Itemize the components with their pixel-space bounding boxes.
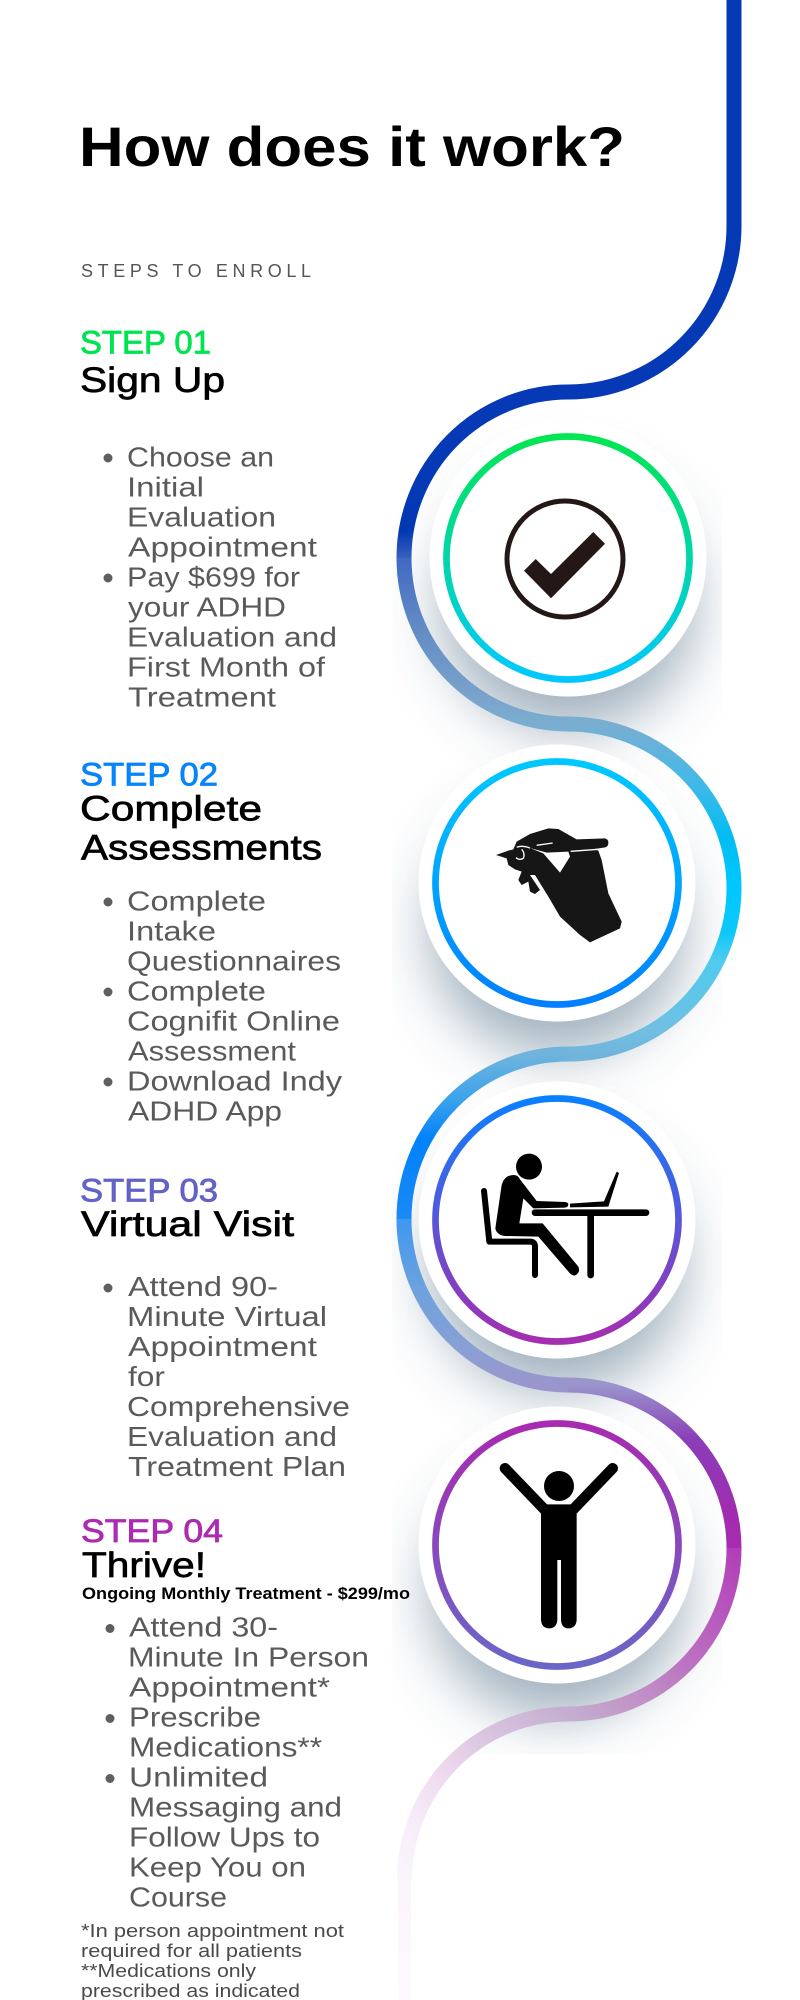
- step 02 list: Download Indy: [127, 1066, 342, 1096]
- circle shadows: [429, 475, 696, 1718]
- step 01 list: Choose an: [127, 442, 274, 472]
- step 01 label: STEP 01: [80, 324, 211, 360]
- step 03 list: Minute Virtual: [127, 1301, 327, 1332]
- step 04 list: Keep You on: [129, 1852, 306, 1882]
- step 02 list: Intake: [127, 916, 216, 946]
- step 02 list: ADHD App: [128, 1096, 282, 1126]
- panel: step 03: [80, 1172, 350, 1482]
- step 01 list: Pay $699 for: [127, 562, 300, 592]
- badge: step 04 raised arms figure: [418, 1406, 696, 1684]
- footnotes: [81, 1920, 344, 2000]
- step 02 list: Complete: [127, 886, 266, 916]
- step 04 label: STEP 04: [81, 1513, 223, 1549]
- step 01 list: your ADHD: [128, 592, 286, 622]
- step 02 list: Cognifit Online: [127, 1006, 340, 1036]
- step 03 list: [104, 1271, 350, 1482]
- footnotes: required for all patients: [81, 1940, 302, 1961]
- footnotes: **Medications only: [81, 1960, 257, 1981]
- badge: step 03 person at laptop: [418, 1082, 696, 1358]
- icon: check in circle: [507, 501, 623, 617]
- step 02 list: [104, 886, 342, 1126]
- step 02 list: Complete: [127, 976, 266, 1006]
- step 02 heading: Complete: [80, 790, 262, 828]
- step 03 label: STEP 03: [80, 1172, 218, 1208]
- step 03 list: for: [128, 1361, 165, 1392]
- step 04 list: Unlimited: [129, 1762, 268, 1792]
- step 04 heading: Thrive!: [82, 1546, 206, 1585]
- footnotes: *In person appointment not: [81, 1920, 344, 1941]
- step 03 list: Comprehensive: [127, 1391, 350, 1422]
- step 02 heading: Assessments: [81, 828, 322, 868]
- step 03 list: Treatment Plan: [128, 1451, 346, 1482]
- step 04 list: Prescribe: [129, 1702, 261, 1732]
- icon: person with raised arms: [505, 1468, 613, 1628]
- step 03 heading: Virtual Visit: [81, 1205, 294, 1244]
- badge: step 02 writing hand: [418, 744, 696, 1022]
- title: How does it work?: [79, 115, 625, 178]
- icon: hand holding pen: [496, 828, 622, 942]
- panel: step 01: [80, 324, 337, 712]
- step 01 list: Evaluation and: [127, 622, 337, 652]
- step 03 list: Appointment: [128, 1331, 317, 1362]
- panel: step 02: [80, 756, 342, 1126]
- step 01 list: Evaluation: [127, 502, 276, 532]
- step 01 list: [104, 442, 337, 712]
- step 02 list: Assessment: [128, 1036, 296, 1066]
- subtitle: STEPS TO ENROLL: [81, 261, 311, 281]
- step 02 heading: [80, 790, 322, 868]
- step 02 label: STEP 02: [80, 756, 218, 792]
- step 04 list: Follow Ups to: [129, 1822, 320, 1852]
- step 04 pricing note: Ongoing Monthly Treatment - $299/mo: [82, 1585, 410, 1603]
- step 01 heading: Sign Up: [80, 361, 225, 400]
- step 04 list: Medications**: [129, 1732, 322, 1762]
- step 01 list: Appointment: [128, 532, 317, 562]
- step 04 list: Messaging and: [129, 1792, 342, 1822]
- step 01 list: Initial: [127, 472, 204, 502]
- step 04 list: Course: [129, 1882, 227, 1912]
- step 04 list: Appointment*: [129, 1672, 330, 1702]
- step 02 list: Questionnaires: [127, 946, 341, 976]
- step 01 list: First Month of: [127, 652, 325, 682]
- icon: person working at desk: [484, 1154, 646, 1275]
- step 03 list: Attend 90-: [128, 1271, 278, 1302]
- step 04 list: Attend 30-: [129, 1612, 278, 1642]
- step 04 list: [106, 1612, 369, 1912]
- step 01 list: Treatment: [128, 682, 276, 712]
- step 03 list: Evaluation and: [127, 1421, 337, 1452]
- badge: step 01 checkmark: [430, 420, 706, 696]
- winding connector path: [404, 0, 734, 2000]
- step 04 list: Minute In Person: [128, 1642, 369, 1672]
- panel: step 04: [81, 1513, 410, 2000]
